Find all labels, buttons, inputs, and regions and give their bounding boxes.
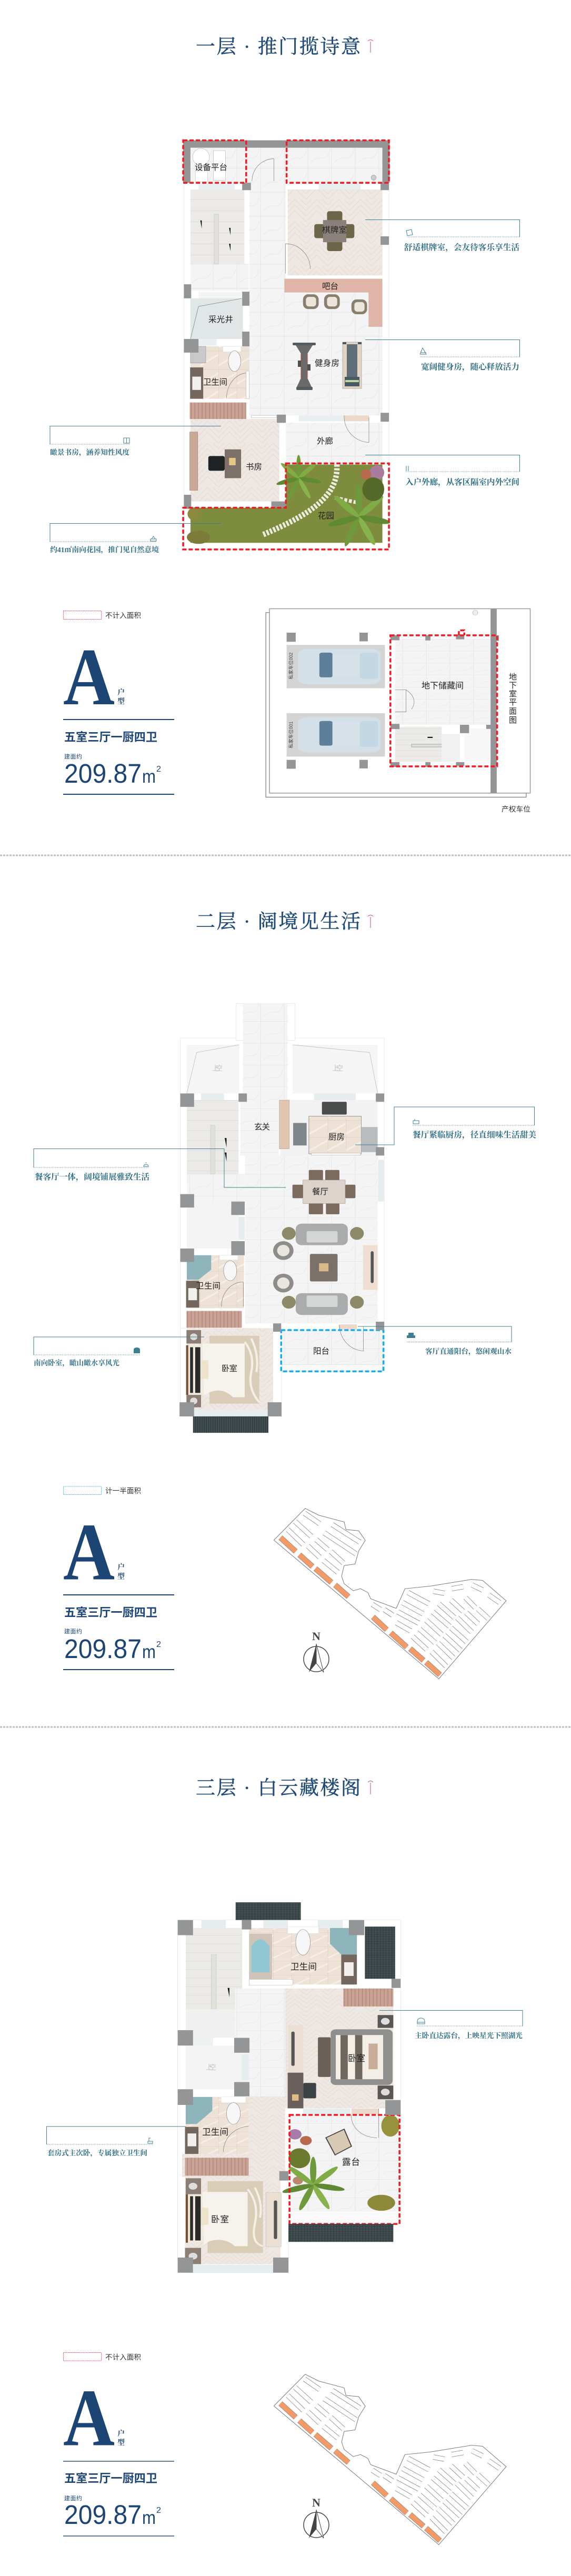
unit letter: 户 xyxy=(117,2429,125,2438)
garden xyxy=(187,455,390,547)
compass: third floor xyxy=(304,2496,329,2538)
void: right xyxy=(293,1045,378,1093)
room labels: second floor: 阳台 xyxy=(313,1346,329,1356)
callout: garden xyxy=(50,523,221,554)
room count: 五室三厅一厨四卫 xyxy=(64,1606,157,1619)
kitchen xyxy=(279,1100,378,1155)
balcony xyxy=(281,1324,384,1371)
room labels: second floor: 上空 xyxy=(332,1064,343,1072)
callout: dining xyxy=(34,1149,286,1187)
master bathroom xyxy=(249,1926,357,1985)
labels: basement xyxy=(288,652,530,813)
legend xyxy=(63,611,141,620)
corridor xyxy=(235,1989,285,2096)
unit letter: A xyxy=(63,2373,115,2463)
title: third floor: 三层 · 白云藏楼阁 xyxy=(196,1777,360,1799)
room labels: second floor: 厨房 xyxy=(328,1132,345,1142)
void: middle xyxy=(187,1207,238,1249)
floor plan: first floor xyxy=(183,141,390,550)
title: first floor: 一层 · 推门揽诗意 xyxy=(196,36,360,58)
main floor xyxy=(241,1100,278,1155)
columns xyxy=(178,1920,400,2273)
area: 209.87 xyxy=(64,1634,142,1664)
room count: 五室三厅一厨四卫 xyxy=(64,2472,157,2485)
bathroom xyxy=(185,2097,249,2154)
callout: balcony: 客厅直通阳台，悠闲观山水 xyxy=(425,1347,512,1356)
car: parking 001 xyxy=(287,713,385,756)
callout: bedroom: 南向卧室，瞰山瞰水享风光 xyxy=(34,1359,119,1367)
legend: 不计入面积 xyxy=(105,612,141,620)
wardrobe xyxy=(185,2158,249,2175)
bathroom xyxy=(190,346,249,399)
compass: third floor: N xyxy=(312,2496,320,2509)
room labels: first floor xyxy=(195,163,347,521)
room labels: third floor xyxy=(202,1962,365,2224)
stair xyxy=(187,1100,238,1174)
gym equipment: exercise bike xyxy=(293,343,316,390)
callout: gym: 宽阔健身房，随心释放活力 xyxy=(421,362,519,372)
callouts: first floor xyxy=(50,220,520,554)
dining set xyxy=(293,1170,355,1214)
room labels: first floor: 花园 xyxy=(318,511,334,521)
callout: kitchen xyxy=(355,1107,536,1145)
basement plan xyxy=(266,608,530,813)
labels: basement: 下 xyxy=(509,681,517,690)
room: chess room xyxy=(288,189,383,275)
callout: bedroom xyxy=(34,1337,204,1367)
callout: study: 瞰景书房，涵养知性风度 xyxy=(50,448,129,457)
room labels: second floor: 上空 xyxy=(212,1064,223,1072)
room labels: second floor: 餐厅 xyxy=(312,1187,328,1196)
callout: chess room: 舒适棋牌室，会友待客乐享生活 xyxy=(404,242,519,253)
wardrobe xyxy=(190,403,246,419)
light well xyxy=(191,298,243,339)
labels: basement: 地 xyxy=(509,673,517,682)
callout: gym xyxy=(365,340,520,372)
labels: basement: 私家车位002 xyxy=(288,652,294,680)
info panel: third floor xyxy=(63,2353,174,2536)
area: m xyxy=(142,1642,156,1662)
unit letter: 型 xyxy=(117,2438,125,2447)
callout: study xyxy=(50,426,221,457)
room labels: second floor: 卧室 xyxy=(222,1364,237,1373)
area: 209.87 xyxy=(64,2500,142,2530)
roof xyxy=(193,1416,268,1433)
callout: corridor: 入户外廊，从客区隔室内外空间 xyxy=(405,477,519,487)
gym equipment: treadmill xyxy=(343,342,362,388)
roof: bottom xyxy=(288,2224,393,2242)
callout: corridor xyxy=(365,455,520,487)
stair xyxy=(186,1928,242,2009)
legend: 不计入面积 xyxy=(105,2353,141,2361)
floor plan: third floor xyxy=(178,1902,400,2273)
labels: basement: 地下储藏间 xyxy=(422,681,464,691)
bar counter xyxy=(284,279,383,327)
room labels: first floor: 采光井 xyxy=(208,315,233,324)
area: 2 xyxy=(156,765,161,774)
title: second floor: 二层 · 阔境见生活 xyxy=(196,911,360,933)
area: 建面约 xyxy=(64,753,82,760)
living set xyxy=(273,1224,378,1315)
callouts: third floor xyxy=(46,2011,523,2158)
area: 建面约 xyxy=(64,1628,82,1635)
room labels: third floor: 卫生间 xyxy=(202,2127,228,2137)
callout: dining: 餐客厅一体，阔境铺展雅致生活 xyxy=(35,1172,149,1182)
callout: kitchen: 餐厅紧临厨房，径直细味生活甜美 xyxy=(413,1130,536,1140)
labels: basement: 平 xyxy=(509,698,517,707)
terrace xyxy=(282,2109,399,2224)
callout: balcony xyxy=(358,1326,512,1356)
room labels: first floor: 健身房 xyxy=(315,358,339,368)
info panel: first floor xyxy=(63,611,174,794)
master bedroom xyxy=(285,1989,393,2109)
unit letter: 型 xyxy=(117,697,125,706)
room labels: second floor xyxy=(196,1064,345,1373)
area: 建面约 xyxy=(64,2494,82,2502)
roof: top xyxy=(236,1902,301,1920)
unit letter: A xyxy=(63,632,115,722)
labels: basement: 私家车位001 xyxy=(288,721,294,748)
room labels: first floor: 棋牌室 xyxy=(322,225,347,235)
room labels: first floor: 卫生间 xyxy=(203,377,227,387)
labels: basement: 图 xyxy=(509,716,517,725)
compass: second floor: N xyxy=(312,1630,320,1643)
callout: garden: 约41㎡南向花园，推门见自然意境 xyxy=(50,545,159,554)
room labels: third floor: 卧室 xyxy=(348,2053,365,2063)
room labels: third floor: 卫生间 xyxy=(290,1962,317,1972)
callout: master bedroom xyxy=(379,2011,523,2040)
callout: chess room xyxy=(365,220,520,253)
legend: 计一半面积 xyxy=(105,1487,141,1495)
stair xyxy=(191,189,244,264)
callouts: second floor xyxy=(34,1107,536,1367)
site map: second floor xyxy=(274,1509,506,1679)
void: left xyxy=(187,1045,239,1093)
room labels: first floor: 设备平台 xyxy=(195,163,227,172)
unit letter: 户 xyxy=(117,1563,125,1572)
unit letter: 户 xyxy=(117,688,125,697)
bedroom xyxy=(186,1329,273,1416)
columns xyxy=(179,1093,384,1416)
car: parking 002 xyxy=(287,645,385,688)
hall xyxy=(249,2096,285,2181)
labels: basement: 产权车位 xyxy=(502,805,530,813)
columns xyxy=(184,183,389,509)
labels: basement: 面 xyxy=(509,707,517,716)
room labels: third floor: 露台 xyxy=(342,2157,360,2167)
site map: third floor xyxy=(274,2374,506,2545)
bedroom xyxy=(185,2176,281,2264)
outer corridor xyxy=(286,415,383,463)
room labels: second floor: 卫生间 xyxy=(196,1281,221,1291)
area: m xyxy=(142,2508,156,2528)
info panel: second floor xyxy=(63,1486,174,1670)
wardrobe xyxy=(186,1311,242,1328)
bathroom xyxy=(186,1255,244,1309)
room labels: third floor: 卧室 xyxy=(211,2214,229,2224)
dashed outline: area not counted xyxy=(183,141,389,550)
unit letter: 型 xyxy=(117,1572,125,1581)
area: 209.87 xyxy=(64,758,142,788)
callout: en-suite bathroom: 套房式主次卧，专属独立卫生间 xyxy=(47,2149,147,2158)
area: 2 xyxy=(156,2506,161,2515)
floor plan: second floor xyxy=(179,1003,384,1433)
study xyxy=(190,415,279,502)
area: 2 xyxy=(156,1640,161,1649)
room labels: first floor: 外廊 xyxy=(317,436,333,446)
room labels: second floor: 玄关 xyxy=(254,1122,270,1132)
room labels: first floor: 吧台 xyxy=(322,282,338,291)
storage room xyxy=(390,630,499,767)
callout: master bedroom: 主卧直达露台，上映星光下照湖光 xyxy=(415,2031,523,2040)
area: m xyxy=(142,766,156,787)
compass: second floor xyxy=(304,1630,329,1672)
room labels: first floor: 书房 xyxy=(246,462,262,472)
room count: 五室三厅一厨四卫 xyxy=(64,731,157,744)
unit letter: A xyxy=(63,1506,115,1597)
room labels: third floor: 上空 xyxy=(206,2063,216,2071)
legend xyxy=(63,2353,141,2361)
labels: basement: 室 xyxy=(509,690,517,698)
legend xyxy=(63,1486,141,1495)
callout: en-suite bathroom xyxy=(46,2126,186,2158)
void xyxy=(186,2045,242,2089)
